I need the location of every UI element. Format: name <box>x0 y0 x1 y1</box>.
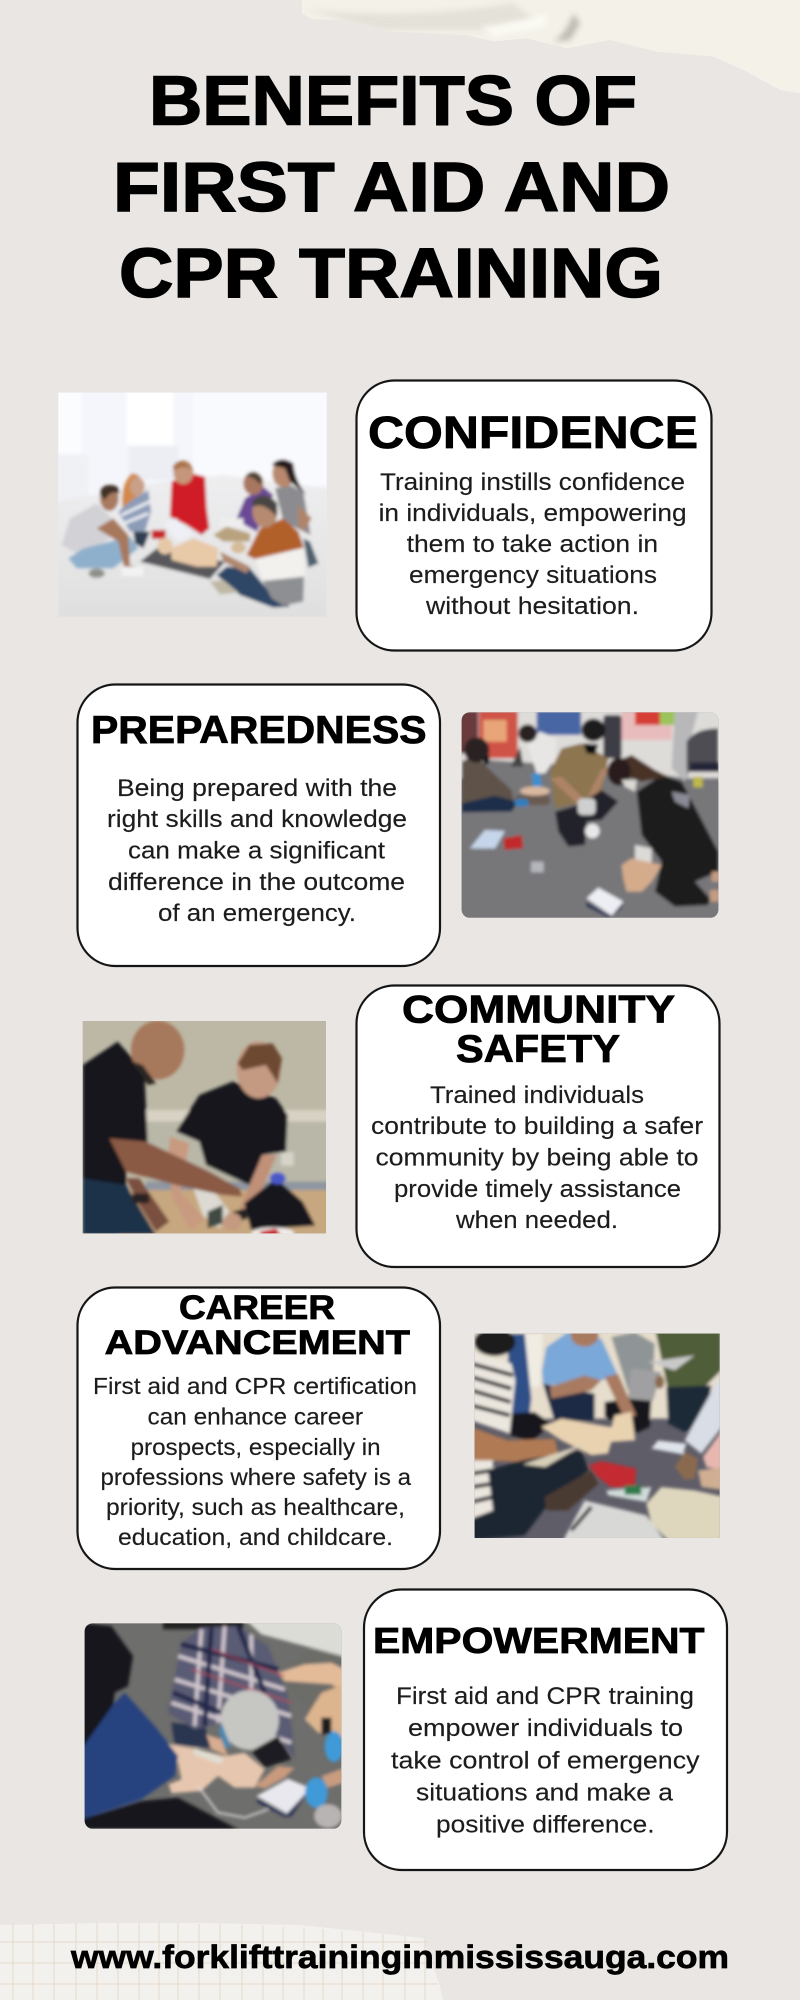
heading: confidence: CONFIDENCE <box>368 407 698 458</box>
panel: empowerment <box>364 1590 727 1870</box>
body: empowerment: empower individuals to <box>408 1715 683 1742</box>
body: preparedness <box>107 775 407 927</box>
body: confidence: them to take action in <box>407 531 658 558</box>
body: community safety: community by being able to <box>376 1144 698 1172</box>
body: confidence: emergency situations <box>409 562 657 589</box>
body: empowerment: take control of emergency <box>391 1748 700 1774</box>
heading: career advancement: CAREER <box>179 1289 335 1327</box>
body: career advancement: can enhance career <box>148 1404 363 1430</box>
body: preparedness: difference in the outcome <box>108 869 405 896</box>
torn paper: top right <box>300 0 800 97</box>
body: community safety <box>371 1082 703 1234</box>
body: empowerment <box>391 1683 700 1838</box>
footer website url: www.forklifttraininginmississauga.com <box>70 1939 729 1975</box>
panel: career advancement <box>78 1288 440 1569</box>
body: empowerment: First aid and CPR training <box>396 1683 694 1710</box>
heading: community safety: COMMUNITY <box>402 988 675 1032</box>
heading: empowerment: EMPOWERMENT <box>373 1620 704 1661</box>
photo: group first aid class <box>58 392 327 616</box>
title: BENEFITS OF <box>149 62 637 140</box>
body: career advancement: First aid and CPR certification <box>93 1373 417 1399</box>
body: confidence: without hesitation. <box>425 593 639 620</box>
body: community safety: provide timely assistance <box>394 1176 681 1203</box>
body: preparedness: of an emergency. <box>158 900 356 927</box>
photo: floor CPR practice with AED <box>462 712 718 918</box>
body: preparedness: right skills and knowledge <box>107 806 407 833</box>
body: confidence <box>379 469 687 620</box>
body: community safety: contribute to building a safer <box>371 1113 703 1140</box>
body: career advancement <box>93 1373 417 1550</box>
photo: instructor guiding trainee <box>82 1021 326 1234</box>
body: community safety: when needed. <box>455 1207 618 1234</box>
body: career advancement: professions where safety is a <box>100 1464 411 1490</box>
body: community safety: Trained individuals <box>430 1082 644 1109</box>
body: preparedness: Being prepared with the <box>117 775 397 802</box>
heading: preparedness: PREPAREDNESS <box>91 709 426 752</box>
heading: career advancement <box>105 1289 410 1362</box>
body: empowerment: situations and make a <box>416 1780 674 1806</box>
heading: community safety <box>402 988 675 1071</box>
title <box>113 62 670 312</box>
panel: community safety <box>356 986 720 1267</box>
title: FIRST AID AND <box>113 148 670 226</box>
footer graph paper <box>0 1923 443 2000</box>
body: career advancement: prospects, especially in <box>131 1434 381 1460</box>
panel: preparedness <box>78 684 440 966</box>
heading: career advancement: ADVANCEMENT <box>105 1324 410 1362</box>
panel: confidence <box>356 380 712 650</box>
heading: community safety: SAFETY <box>456 1028 620 1071</box>
body: confidence: Training instills confidence <box>380 469 685 496</box>
body: career advancement: education, and childcare. <box>118 1524 393 1550</box>
body: empowerment: positive difference. <box>436 1812 654 1838</box>
body: career advancement: priority, such as healthcare, <box>106 1494 405 1520</box>
photo: group around manikin <box>474 1334 720 1538</box>
photo: CPR on infant manikin <box>84 1623 342 1829</box>
body: confidence: in individuals, empowering <box>379 500 687 527</box>
title: CPR TRAINING <box>119 234 663 312</box>
body: preparedness: can make a significant <box>128 838 385 864</box>
